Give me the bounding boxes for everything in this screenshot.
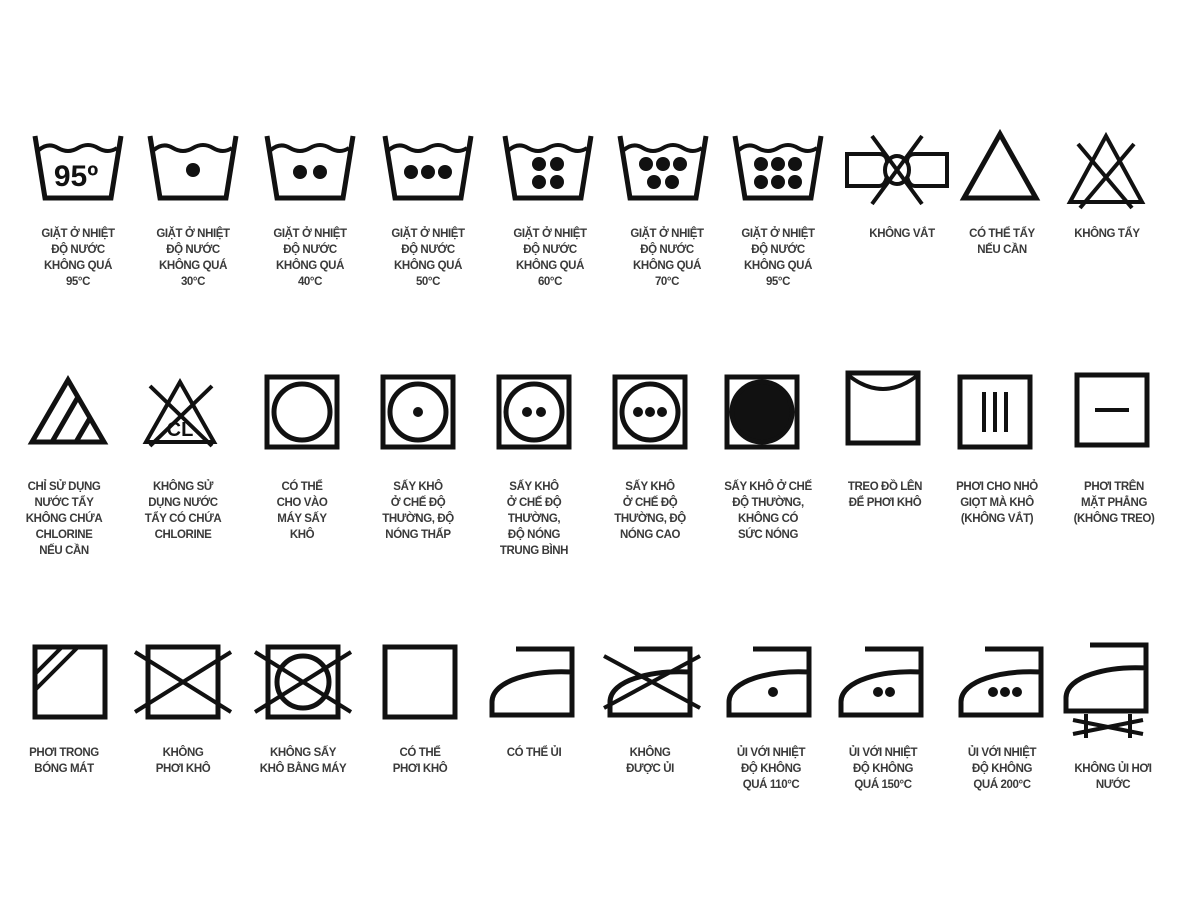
label: ỦI VỚI NHIỆT [968,747,1036,759]
icon: no bleach [1070,136,1142,208]
icon: wash 30 [150,136,236,198]
icon: dry flat [1077,375,1147,445]
icon: wash 70 [620,136,706,198]
icon: bleach [964,134,1036,198]
label [848,479,922,509]
label [741,226,815,288]
label [382,479,454,541]
label: MÁY SẤY [277,513,327,525]
label: ĐỘ KHÔNG [853,763,913,775]
label: TREO ĐỒ LÊN [848,481,922,493]
label: DỤNG NƯỚC [148,497,218,509]
label: PHƠI CHO NHỎ [956,481,1038,493]
label: KHÔNG QUÁ [276,260,344,272]
label row 3: PHƠI TRONG [29,747,99,759]
label: 95°C [766,276,790,288]
label row 1: 95°C [66,276,90,288]
label: TRUNG BÌNH [500,545,568,557]
label: KHÔNG QUÁ [516,260,584,272]
label: ĐỘ NƯỚC [523,244,577,256]
label: ĐỘ KHÔNG [972,763,1032,775]
label row 1 [41,226,115,288]
label: THƯỜNG, ĐỘ [614,513,686,525]
label [626,745,674,775]
label: ĐỂ PHƠI KHÔ [849,497,921,509]
label: Ở CHẾ ĐỘ [507,497,561,509]
label: (KHÔNG VẮT) [961,513,1033,525]
label [393,745,448,775]
label [1074,761,1152,791]
label [156,745,210,775]
label [1074,479,1154,525]
label: KHÔNG ỦI HƠI [1074,763,1152,775]
label: GIẶT Ở NHIỆT [273,228,347,240]
label: KHÔNG [163,747,203,759]
label: QUÁ 110°C [743,779,799,791]
label: GIỌT MÀ KHÔ [960,497,1034,509]
label [144,479,222,541]
label: PHƠI KHÔ [156,763,210,775]
label: NƯỚC [1096,779,1130,791]
label: GIẶT Ở NHIỆT [391,228,465,240]
label row 2 [26,479,102,557]
icon: dry [385,647,455,717]
icon: tumble dry medium [499,377,569,447]
label: GIẶT Ở NHIỆT [156,228,230,240]
label: ĐỘ NƯỚC [751,244,805,256]
label: ĐỘ NƯỚC [283,244,337,256]
label: SẤY KHÔ [393,481,443,493]
label: 30°C [181,276,205,288]
icon: wash 95: 95º [54,160,98,193]
label: KHÔ BẰNG MÁY [260,763,346,775]
label row 2: CHỈ SỬ DỤNG [28,481,100,493]
icon: wash 60 [505,136,591,198]
label: CÓ THỂ ỦI [507,747,561,759]
label [273,226,347,288]
label: 40°C [298,276,322,288]
label: KHÔ [290,529,314,541]
icon: do not iron [604,649,700,715]
label row 2: NẾU CẦN [39,545,89,557]
label: SỨC NÓNG [738,529,798,541]
label: ỦI VỚI NHIỆT [849,747,917,759]
icon: tumble dry high [615,377,685,447]
label: CHLORINE [155,529,211,541]
label [391,226,465,288]
label: KHÔNG VẮT [869,228,935,240]
label: SẤY KHÔ [509,481,559,493]
label: PHƠI KHÔ [393,763,447,775]
icon: dry in shade [35,647,105,717]
label: ĐỘ NƯỚC [640,244,694,256]
label [500,479,568,557]
label row 2: CHLORINE [36,529,92,541]
icon: do not wring [847,136,947,204]
label row 2: KHÔNG CHỨA [26,513,102,525]
label: ĐỘ NƯỚC [401,244,455,256]
icon: drip dry [960,377,1030,447]
label: NẾU CẦN [977,244,1027,256]
label: ĐỘ NÓNG [508,529,560,541]
icon: tumble dry [267,377,337,447]
label: NÓNG THẤP [385,529,451,541]
icon: do not dry [135,647,231,717]
label: 60°C [538,276,562,288]
label [724,479,812,541]
label: THƯỜNG, [508,513,560,525]
label: CÓ THỂ [281,481,323,493]
label [156,226,230,288]
label: GIẶT Ở NHIỆT [513,228,587,240]
label: MẶT PHẲNG [1081,497,1147,509]
label: SẤY KHÔ Ở CHẾ [724,481,812,493]
label [956,479,1038,525]
label: Ở CHẾ ĐỘ [391,497,445,509]
label [969,226,1035,256]
icon: no chlorine bleach [146,382,214,446]
icon: no steam [1066,645,1146,738]
label: Ở CHẾ ĐỘ [623,497,677,509]
label [260,745,346,775]
label: KHÔNG CÓ [738,513,798,525]
label: KHÔNG QUÁ [744,260,812,272]
label: 50°C [416,276,440,288]
label [630,226,704,288]
label row 2: NƯỚC TẨY [35,497,93,509]
label [968,745,1036,791]
label: ĐỘ KHÔNG [741,763,801,775]
label: (KHÔNG TREO) [1074,513,1154,525]
label: 70°C [655,276,679,288]
label: PHƠI TRÊN [1084,481,1144,493]
label row 1: KHÔNG QUÁ [44,260,112,272]
icon: wash 95 [35,136,121,198]
label: KHÔNG SỬ [153,481,213,493]
label row 1: GIẶT Ở NHIỆT [41,228,115,240]
label: THƯỜNG, ĐỘ [382,513,454,525]
icon: iron low [729,649,809,715]
icon: iron [492,649,572,715]
icon: non-chlorine bleach [32,380,104,442]
label: QUÁ 200°C [973,779,1031,791]
label [849,745,918,791]
label: ĐỘ NƯỚC [166,244,220,256]
label: CHO VÀO [277,497,327,509]
label: CÓ THỂ TẨY [969,228,1035,240]
label: NÓNG CAO [620,529,680,541]
icon: do not tumble dry [255,647,351,717]
label: SẤY KHÔ [625,481,675,493]
label: KHÔNG [630,747,670,759]
label: ĐỘ THƯỜNG, [732,497,804,509]
icon: wash 95 dots [735,136,821,198]
label: TẨY CÓ CHỨA [145,513,221,525]
icon: wash 50 [385,136,471,198]
label: QUÁ 150°C [854,779,912,791]
icon: tumble dry low [383,377,453,447]
label: KHÔNG SẤY [270,747,336,759]
label: GIẶT Ở NHIỆT [741,228,815,240]
label: KHÔNG TẨY [1074,228,1140,240]
icon: iron medium [841,649,921,715]
label row 1: ĐỘ NƯỚC [51,244,105,256]
label: ỦI VỚI NHIỆT [737,747,805,759]
icon: no chlorine bleach: CL [167,419,193,441]
label: GIẶT Ở NHIỆT [630,228,704,240]
label: ĐƯỢC ỦI [626,763,674,775]
label [614,479,686,541]
icon: tumble dry no heat [727,377,797,447]
label [737,745,806,791]
label: KHÔNG QUÁ [633,260,701,272]
label: CÓ THỂ [399,747,441,759]
label: KHÔNG QUÁ [394,260,462,272]
label row 3 [29,747,99,775]
icon: iron high [961,649,1041,715]
label: KHÔNG QUÁ [159,260,227,272]
icon: line dry [848,373,918,443]
label [513,226,587,288]
label [277,479,328,541]
label row 3: BÓNG MÁT [34,763,94,775]
icon: wash 40 [267,136,353,198]
